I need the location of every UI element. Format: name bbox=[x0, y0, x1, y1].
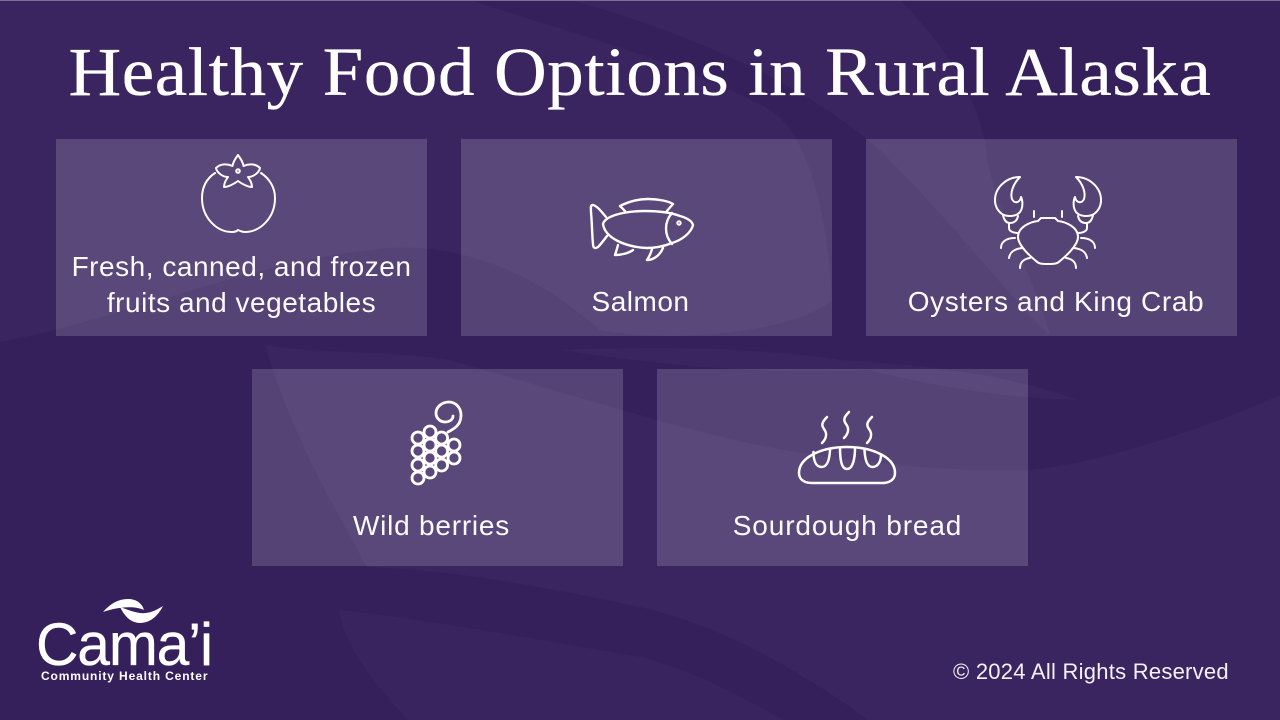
label: wild berries: Wild berries bbox=[353, 510, 510, 541]
panel: salmon bbox=[461, 139, 832, 336]
logo mark: swoosh bbox=[103, 599, 163, 623]
icon: grapes bbox=[410, 400, 462, 486]
panel: fruits and vegetables bbox=[56, 139, 427, 336]
label: fruits and vegetables: Fresh, canned, and frozen bbox=[72, 251, 411, 282]
panel: oysters and king crab bbox=[866, 139, 1237, 336]
icon: fish bbox=[590, 198, 694, 262]
label: salmon: Salmon bbox=[592, 286, 689, 317]
copyright: © 2024 All Rights Reserved bbox=[953, 659, 1229, 684]
logo: Camai Community Health Center bbox=[36, 599, 212, 683]
logo tagline: Community Health Center bbox=[41, 669, 208, 683]
label: oysters and king crab: Oysters and King Crab bbox=[908, 286, 1204, 317]
logo wordmark: Cama’i bbox=[36, 611, 212, 678]
label: fruits and vegetables: fruits and vegetables bbox=[107, 286, 376, 318]
label: fruits and vegetables bbox=[72, 251, 411, 318]
icon: bread bbox=[798, 410, 896, 484]
icon: crab bbox=[994, 176, 1102, 269]
title: Healthy Food Options in Rural Alaska bbox=[68, 34, 1212, 110]
panel: sourdough bread bbox=[657, 369, 1028, 566]
label: sourdough bread: Sourdough bread bbox=[733, 510, 962, 541]
icon: tomato bbox=[201, 154, 276, 233]
panel: wild berries bbox=[252, 369, 623, 566]
